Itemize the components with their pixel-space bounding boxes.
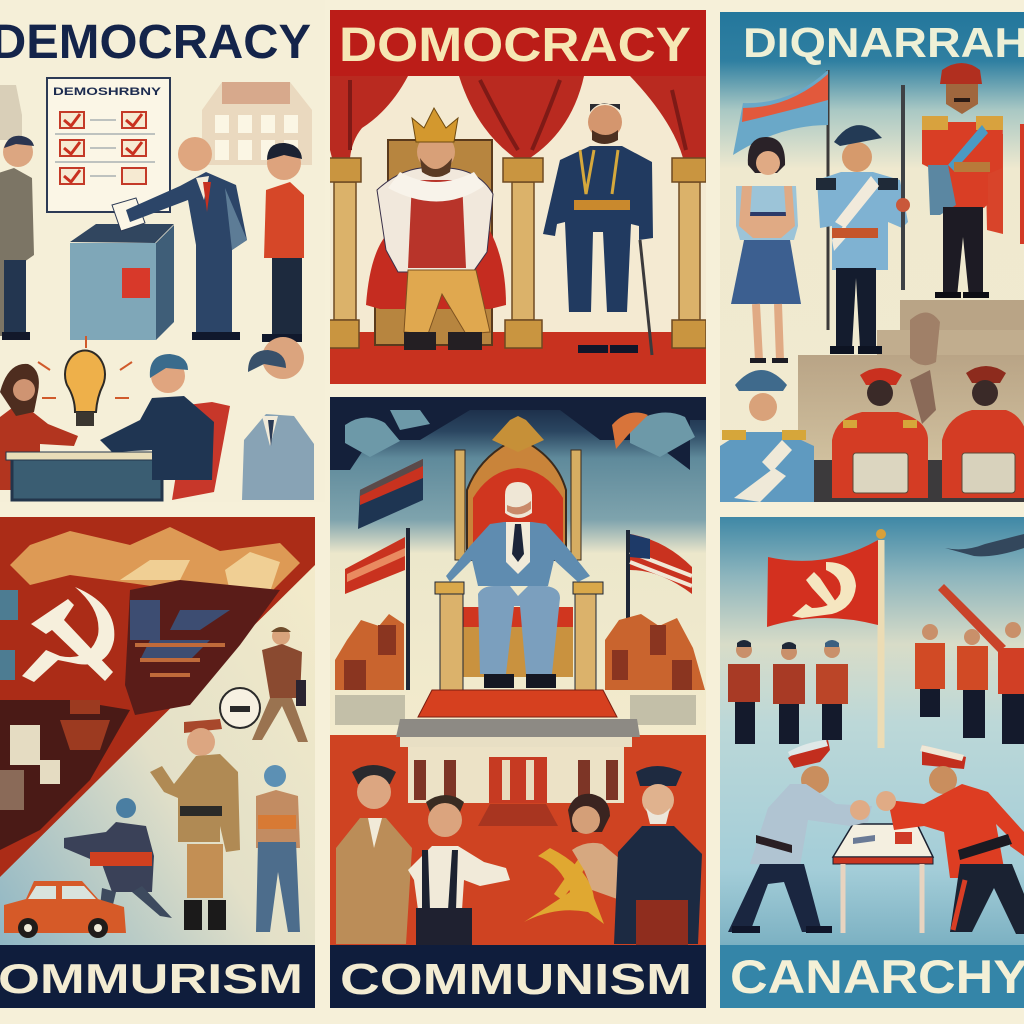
- commander in red on plinth: [922, 63, 1024, 298]
- officer in blue uniform: [728, 740, 872, 933]
- panel: monarchy throne: [329, 10, 706, 384]
- hammer and sickle gold: [524, 848, 604, 924]
- heading band: CANARCHY: CANARCHY: [730, 950, 1024, 1003]
- bulb discussion scene: [0, 336, 314, 500]
- red curtains: [330, 76, 706, 158]
- woman with headscarf: [568, 794, 626, 900]
- panel: democracy voting: [0, 0, 325, 502]
- heading: DIGNARRAH: DIQNARRAH: [743, 19, 1024, 66]
- heading: DEMOCRACY: DEMOCRACY: [0, 16, 311, 69]
- flag left upper: [358, 459, 423, 529]
- red car: [4, 881, 126, 938]
- icon: hammer and sickle: [22, 587, 114, 682]
- heading band: COMMUNISM: [330, 945, 706, 1008]
- dark smoke top right: [945, 534, 1024, 556]
- panel: communism throne: [330, 397, 706, 1008]
- heading band: DOMOCRACY: DOMOCRACY: [339, 19, 691, 72]
- red dais: [396, 690, 640, 737]
- man in tan coat: [336, 765, 412, 944]
- figure: man in red: [262, 143, 304, 342]
- row of guards right with salute: [915, 584, 1024, 744]
- officer in red uniform: [876, 745, 1024, 934]
- seated officers row: [720, 366, 1024, 502]
- ballot poster: [47, 78, 170, 212]
- panel: anarchy negotiation: [720, 517, 1024, 1008]
- crowds: [335, 614, 705, 725]
- guard in blue with sash: [816, 85, 910, 354]
- red ground: [330, 735, 706, 945]
- figure: voter in suit: [126, 137, 247, 340]
- soldier far: [220, 627, 308, 742]
- king on throne: [366, 108, 506, 350]
- american flag: [626, 530, 692, 618]
- heading band: COMMURISM: [0, 945, 315, 1008]
- golden columns: [329, 158, 706, 348]
- background building: [0, 82, 312, 165]
- red flag with hammer and sickle: [767, 529, 886, 748]
- woman in dress: [731, 137, 801, 363]
- table: [833, 824, 933, 933]
- ballot box: [70, 198, 174, 340]
- civilian in blue: [256, 765, 300, 932]
- row of small guards left: [728, 640, 848, 744]
- officer with beard: [614, 766, 702, 945]
- soldier running with gun: [64, 798, 172, 926]
- worker in white shirt: [408, 795, 510, 945]
- heading band: DOMOCRACY: [330, 10, 706, 76]
- government building: [400, 737, 632, 826]
- red diagonal field: [0, 517, 315, 877]
- monument plinth: [798, 300, 1024, 502]
- heading band: COMMURISM: OMMURISM: [0, 955, 303, 1002]
- waving flag: [733, 70, 828, 330]
- red carpet floor: [330, 332, 706, 384]
- flag left lower: [345, 528, 408, 690]
- heading band: COMMUNISM: COMMUNISM: [340, 955, 692, 1004]
- general standing: [543, 103, 653, 355]
- panel: communism war scene: [0, 517, 315, 1008]
- panel: dictatorship parade: [720, 12, 1024, 502]
- ballot poster: DEMOSHRBNY: [53, 86, 162, 98]
- dark storm clouds: [330, 397, 706, 470]
- officer in khaki: [150, 719, 240, 930]
- figure: man left: [0, 136, 34, 340]
- throne and seated leader: [435, 416, 603, 690]
